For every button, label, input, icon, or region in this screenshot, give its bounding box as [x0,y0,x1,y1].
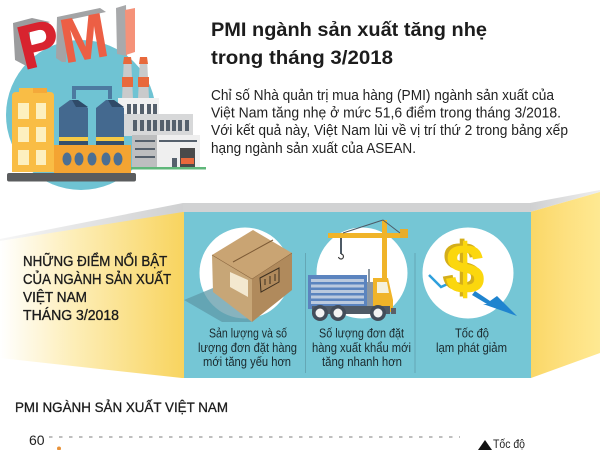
axis label 60: 60 [29,432,45,448]
title: trong tháng 3/2018 [211,47,393,69]
icon: dollar with falling arrow: $ [443,228,481,306]
teal panel [182,212,531,378]
panel heading: VIỆT NAM [23,289,87,306]
orange tank base [54,145,131,173]
text: column 3: lạm phát giảm [436,341,507,355]
letter M: M [55,1,113,77]
text: column 1: Sản lượng và số [209,326,287,340]
crane [328,220,408,300]
chart heading: PMI NGÀNH SẢN XUẤT VIỆT NAM [15,399,228,415]
intro text: Việt Nam tăng nhẹ ở mức 51,6 điểm trong tháng 3/2018. [211,104,561,122]
tanks [59,88,124,145]
intro text: hạng ngành sản xuất của ASEAN. [211,140,416,157]
text: column 1: lượng đơn đặt hàng [198,341,297,355]
left yellow fold [0,212,183,378]
text: column 2: tăng nhanh hơn [322,355,402,369]
text: column 3: Tốc độ [455,326,489,340]
gridline 60 [49,436,460,438]
icon: dollar with falling arrow [422,228,517,318]
chimneys [122,57,149,99]
panel: highlights band [0,190,600,378]
icon: cardboard box [184,228,292,322]
legend: speed [478,439,525,450]
text: column 1: mới tăng yếu hơn [203,355,291,369]
chart: PMI line chart [29,432,525,450]
letter P: P [11,7,68,84]
panel heading: NHỮNG ĐIỂM NỔI BẬT [23,252,167,270]
intro text: Với kết quả này, Việt Nam lùi về vị trí thứ 2 trong bảng xếp [211,122,568,139]
text: column 2: Số lượng đơn đặt [319,326,404,340]
title: PMI ngành sản xuất tăng nhẹ [211,19,487,41]
first data point [57,446,61,450]
icon: dollar with falling arrow: $ [446,230,484,308]
top strip [0,190,600,241]
panel heading: THÁNG 3/2018 [23,307,119,324]
panel heading: CỦA NGÀNH SẢN XUẤT [23,270,171,288]
intro text: Chỉ số Nhà quản trị mua hàng (PMI) ngành sản xuất của [211,87,555,104]
teal circle backdrop [6,40,156,190]
yellow tower [12,88,54,172]
icon: crane and truck [308,220,408,321]
letter I [116,5,135,56]
factory building [118,98,206,170]
text: column 2: hàng xuất khẩu mới [312,341,411,355]
illustration: PMI factory [6,1,206,190]
column dividers [306,253,415,373]
truck [308,269,396,321]
ground bar [7,173,136,182]
right yellow fold [530,192,600,378]
